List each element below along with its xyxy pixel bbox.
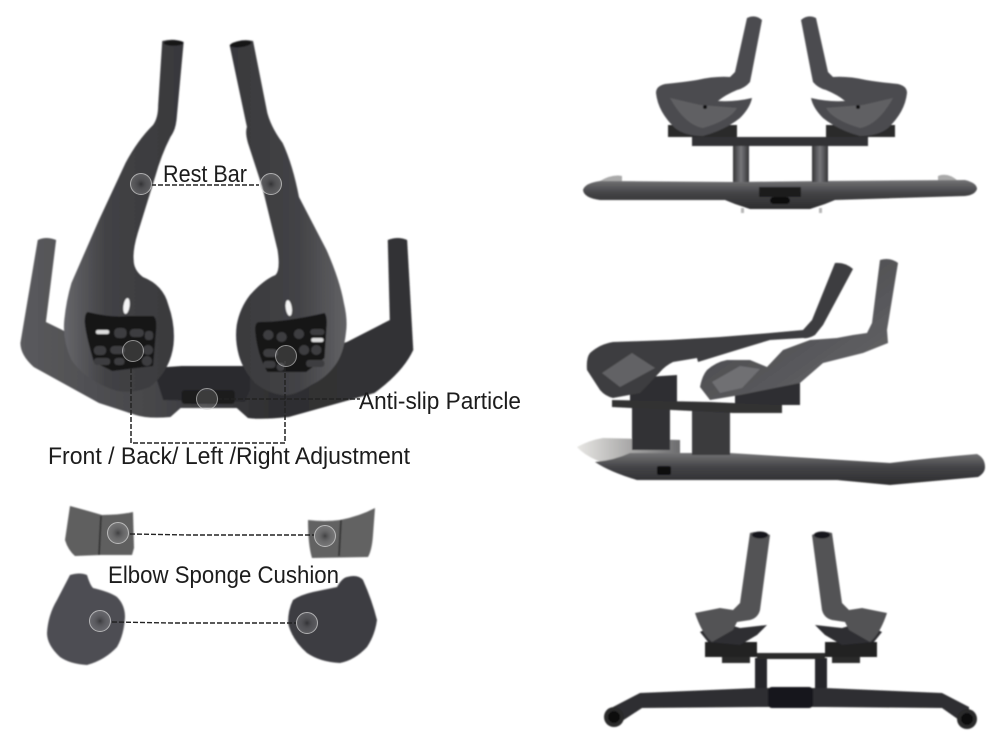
- cushion: bottom right: [288, 576, 377, 663]
- base bar with upturned ends: [20, 238, 413, 419]
- left pad assembly: [656, 16, 762, 137]
- callout: anti-slip particle: Anti-slip Particle: [359, 388, 521, 415]
- right adjustment window: [255, 313, 327, 372]
- centre sponge: [759, 187, 801, 197]
- bar ends: [604, 707, 624, 727]
- bridge detail band: [182, 390, 235, 404]
- risers: [755, 658, 767, 688]
- center bridge plate: [153, 366, 250, 402]
- callout: elbow sponge cushion: [90, 522, 339, 634]
- cushion: bottom left: [47, 574, 125, 665]
- adjustment bolts left: [94, 328, 153, 366]
- cushion: top right: [308, 508, 375, 558]
- elbow sponge cushions: [47, 506, 377, 665]
- product: front rest bar assembly: [20, 39, 413, 419]
- callout: rest bar: [130, 161, 282, 194]
- back pad sponge: [602, 353, 655, 387]
- left adjustment window: [85, 312, 156, 371]
- left rest bar: [64, 40, 184, 392]
- plate: [612, 400, 782, 413]
- pad blocks: [630, 375, 800, 405]
- right pad and tube: [812, 532, 887, 663]
- front aerobar: [700, 259, 898, 400]
- mounting pins: [741, 208, 822, 213]
- centre oval: [770, 197, 790, 204]
- adjustment bolts right: [263, 329, 324, 371]
- cross plate: [757, 653, 825, 659]
- right rest bar: [230, 40, 347, 395]
- right pad assembly: [801, 16, 907, 137]
- product: side view, middle right: [577, 259, 985, 485]
- callout: rest bar: Rest Bar: [163, 161, 247, 188]
- slots: [122, 298, 131, 314]
- back aerobar: [587, 263, 853, 398]
- bar tips: [600, 175, 958, 182]
- bar port: [657, 466, 671, 475]
- callout: elbow sponge cushion: Elbow Sponge Cushion: [108, 562, 339, 589]
- cushion: top left: [65, 506, 134, 556]
- front pad sponge: [712, 366, 760, 393]
- front riser post: [692, 411, 730, 455]
- handlebar: [613, 688, 969, 727]
- main bar: [595, 453, 985, 485]
- aero base bar: [583, 180, 977, 209]
- silver nose: [577, 438, 680, 470]
- centre block: [768, 687, 813, 708]
- callout: anti-slip particle: [196, 388, 521, 415]
- callout: front back left right adjustment: [48, 340, 410, 470]
- back riser post: [632, 408, 670, 450]
- top plate: [692, 137, 868, 146]
- product: rear view, top right: [583, 16, 977, 213]
- tube openings: [164, 40, 183, 46]
- product: front view, bottom right: [604, 532, 977, 729]
- callout: front back left right adjustment: Front / Back/ Left /Right Adjustment: [48, 443, 410, 470]
- left pad and tube: [695, 532, 770, 663]
- riser posts: [733, 146, 749, 182]
